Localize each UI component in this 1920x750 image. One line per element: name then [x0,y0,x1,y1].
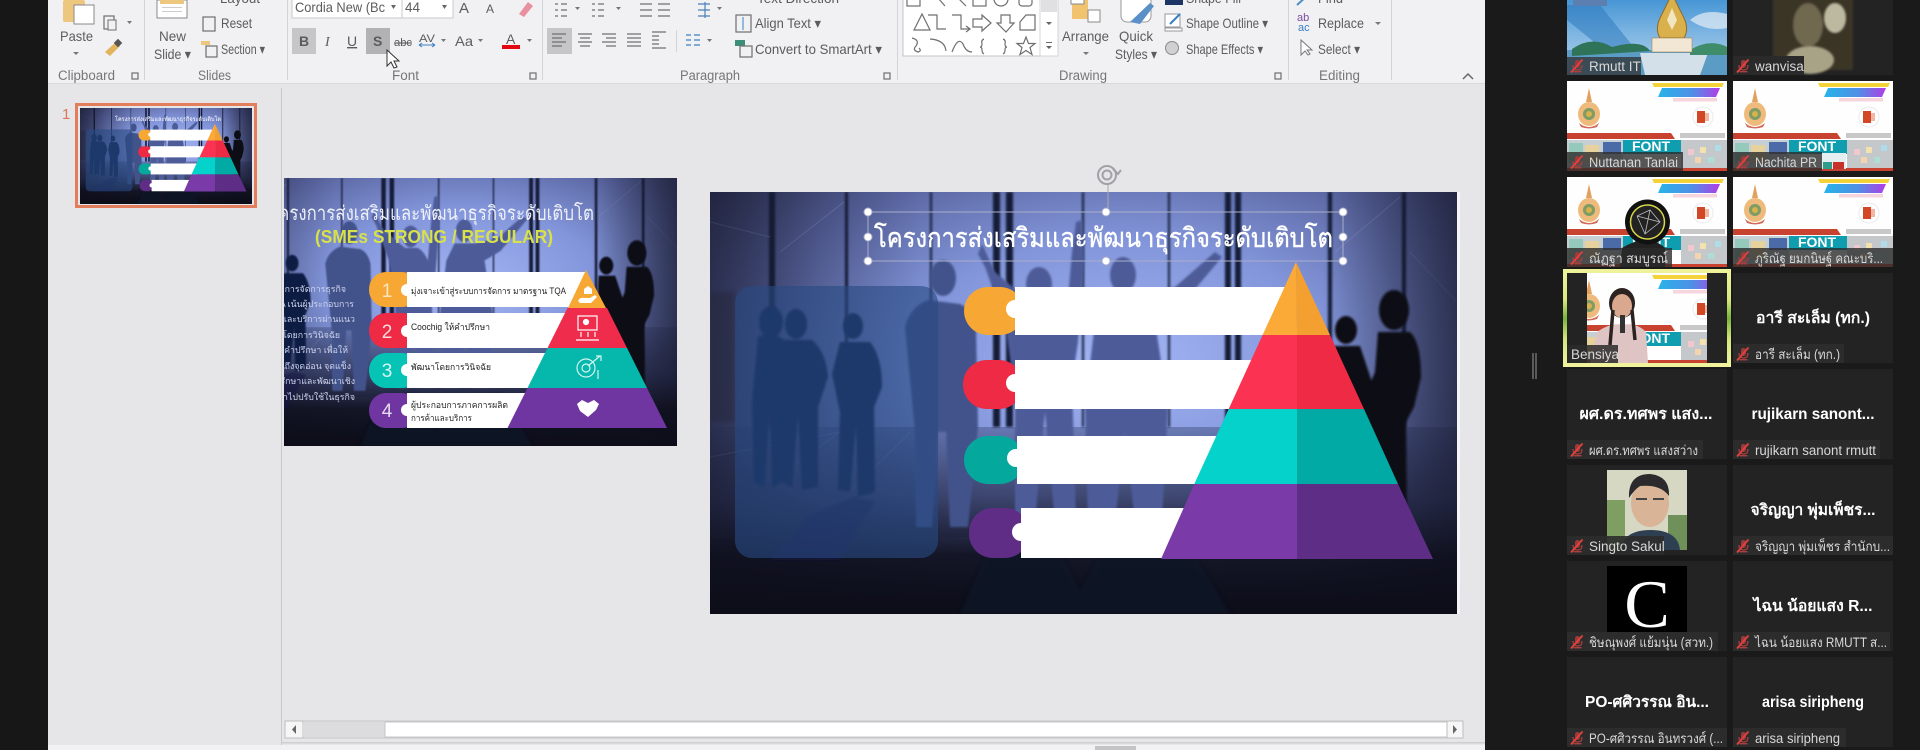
icon: handshake [577,400,599,417]
main slide title: โครงการส่งเสริมและพัฒนาธุรกิจระดับเติบโต [874,223,1333,255]
participant: ชิษณุพงศ์ [1567,561,1727,651]
participant: อารี สะเล็ม: อารี สะเล็ม (ทก.) [1755,345,1840,362]
shape gallery [903,0,1058,56]
participant: Rmutt IT: Rmutt IT [1589,59,1641,74]
font group: A [486,2,494,16]
font group: A [506,31,516,47]
step 3 bar: พัฒนาโดยการวินิจฉัย [411,362,491,372]
clipboard group: Clipboard [58,68,115,83]
participant: ณัฏฐา สมบูรณ์ [1567,177,1727,267]
icon: mouse cursor [387,50,399,68]
small slide side text: การจัดการธุรกิจ [285,284,346,295]
editing group: Replace [1318,15,1364,31]
small slide subtitle: (SMEs STRONG / REGULAR) [315,227,553,247]
drawing group: Drawing [1059,68,1107,83]
participant: จริญญา [1733,465,1893,555]
participant: Singto Sakul [1567,465,1727,555]
font group: B [299,33,309,49]
participant: rujikarn: rujikarn sanont rmutt [1755,443,1876,458]
step 4 bar: ผู้ประกอบการภาคการผลิต [411,400,508,411]
editing group: ab [1297,12,1309,24]
participant: ณัฏฐา สมบูรณ์: ณัฏฐา สมบูรณ์ [1589,250,1668,267]
clipboard group: Paste [60,28,93,44]
step 2 bar: Coochig ให้คำปรึกษา [411,322,490,332]
clipboard group [58,0,138,83]
step 4 bar [369,393,525,428]
participant: ชิษณุพงศ์: ชิษณุพงศ์ แย้มนุ่น (สวท.) [1589,634,1713,651]
paragraph group: Align Text ▾ [755,15,821,31]
font group: S [373,33,382,49]
small slide side text: ค้าและบริการผ่านแนว [270,314,355,324]
participant: จริญญา: จริญญา พุ่มเพ็ชร สำนักบ... [1755,537,1890,555]
editing group [1297,0,1473,83]
slide thumbnail: โครงการส่งเสริมและพัฒนาธุรกิจระดับเติบโต [115,115,221,123]
paragraph group: Convert to SmartArt ▾ [755,41,882,57]
participant: ไฉน น้อยแสง: ไฉน น้อยแสง RMUTT ส... [1754,635,1887,650]
participant: arisa siripheng: arisa siripheng [1755,731,1840,746]
font group: Aa [455,33,473,49]
participant: Nuttanan Tanlai: Nuttanan Tanlai [1589,155,1678,170]
participant: Nachita PR: FONT [1798,138,1836,154]
font group: abc [394,37,412,49]
participant: ไฉน น้อยแสง [1733,561,1893,651]
step 3 bar: 3 [382,361,392,382]
participant: rujikarn [1733,369,1893,459]
font group: I [324,35,331,50]
participant: ผศ.ดร.ทศพร: ผศ.ดร.ทศพร แสงสว่าง [1589,443,1698,458]
slides group: New [159,28,187,44]
participant: Singto Sakul: Singto Sakul [1589,539,1665,554]
editing group: Editing [1319,68,1360,83]
right dark panel [1485,0,1920,750]
step 4 bar: การค้าและบริการ [411,413,472,423]
participant: จริญญา: จริญญา พุ่มเพ็ชร... [1750,499,1876,520]
editing group: ac [1298,22,1310,34]
participant: อารี สะเล็ม [1733,273,1893,363]
small slide side text: โดยการวินิจฉัย [282,330,340,340]
participant: wanvisa: wanvisa [1754,59,1804,74]
powerpoint ribbon [48,0,1485,84]
small slide side text: A เน้นผู้ประกอบการ [280,299,354,310]
slides group [154,0,265,83]
font group: A [459,0,469,17]
slides group: Slide ▾ [154,46,191,62]
participant: ผศ.ดร.ทศพร [1567,369,1727,459]
panel divider handle [1533,353,1536,379]
font group: Font [392,68,419,83]
step 3 bar [369,353,545,388]
editing group: Select ▾ [1318,41,1360,57]
participant: wanvisa [1733,0,1893,75]
paragraph group: Paragraph [680,68,740,83]
step 2 bar [369,313,565,348]
participant: ภูริณัฐ [1733,177,1893,267]
small slide side text: อนำไปปรับใช้ในธุรกิจ [272,392,355,403]
powerpoint workspace [48,84,1485,750]
step 1 bar: 1 [382,281,392,302]
participant: Bensiya active speaker [1565,271,1729,365]
participant: Nachita PR: Nachita PR [1755,155,1817,170]
participant: arisa siripheng [1733,657,1893,747]
drawing group: Styles ▾ [1115,46,1157,62]
icon: target gear [577,356,601,379]
participant: Nuttanan Tanlai: FONT [1632,138,1670,154]
icon: hand with coin [578,286,597,303]
paragraph group [547,0,890,83]
step 2 bar: 2 [382,322,392,343]
status bar [48,745,1485,750]
participant: Rmutt IT [1567,0,1727,75]
icon: presenter board [576,316,599,340]
small slide side text: ถนถึงจุดอ่อน จุดแข็ง [273,360,351,372]
participant: PO-ศศิวรรณ: PO-ศศิวรรณ อิน... [1585,693,1709,711]
step 4 bar: 4 [382,401,393,422]
participant: ชิษณุพงศ์: C [1624,566,1670,642]
font group: AV [419,33,436,45]
drawing group: Quick [1119,28,1154,44]
participant: arisa siripheng: arisa siripheng [1762,694,1864,711]
slide thumbnail [62,104,256,206]
participant: ผศ.ดร.ทศพร: ผศ.ดร.ทศพร แสง... [1580,406,1712,423]
drawing group [1059,0,1281,83]
thumbnail pane divider [281,88,282,745]
participant: Bensiya active speaker: Bensiya [1571,347,1620,362]
participant: ณัฏฐา สมบูรณ์: FONT [1632,234,1670,250]
font group [292,0,536,83]
participant: PO-ศศิวรรณ [1567,657,1727,747]
slides group: Section ▾ [221,41,265,57]
selection box with handles [864,184,1347,265]
small slide side text: ห้คำปรึกษา เพื่อให้ [278,344,348,355]
participant: อารี สะเล็ม: อารี สะเล็ม (ทก.) [1756,307,1870,327]
small slide side text: ปรึกษาและพัฒนาเชิง [275,376,355,386]
drawing group: Shape Effects ▾ [1186,41,1263,57]
drawing group: Arrange [1062,28,1109,44]
slides group: Slides [198,68,231,83]
main slide [710,192,1460,614]
drawing group: Shape Outline ▾ [1186,15,1268,31]
small reference slide [284,178,677,446]
small pyramid [508,270,667,428]
participant: Nuttanan Tanlai [1567,81,1727,171]
participant: ภูริณัฐ: ภูริณัฐ ยมกนิษฐ์ คณะบริ... [1755,250,1883,267]
slide thumbnail: 1 [62,106,70,123]
step 1 bar: มุ่งเจาะเข้าสู่ระบบการจัดการ มาตรฐาน TQA [411,286,566,297]
participant: ภูริณัฐ: FONT [1798,234,1836,250]
horizontal scrollbar [282,721,1485,744]
font group: U [347,33,357,49]
left dark margin [0,0,48,750]
small slide side text [284,285,354,402]
small slide title: โครงการส่งเสริมและพัฒนาธุรกิจระดับเติบโต [269,202,594,226]
participant: ไฉน น้อยแสง: ไฉน น้อยแสง R... [1751,596,1872,615]
slides group: Reset [221,15,252,31]
participant: Nachita PR [1733,81,1893,171]
participant: rujikarn: rujikarn sanont... [1752,406,1874,423]
step 1 bar [369,272,585,307]
participant: PO-ศศิวรรณ: PO-ศศิวรรณ อินทรวงศ์ (... [1589,730,1723,746]
participant: Bensiya active speaker: FONT [1632,330,1670,346]
icon: rotate handle [1098,166,1121,184]
